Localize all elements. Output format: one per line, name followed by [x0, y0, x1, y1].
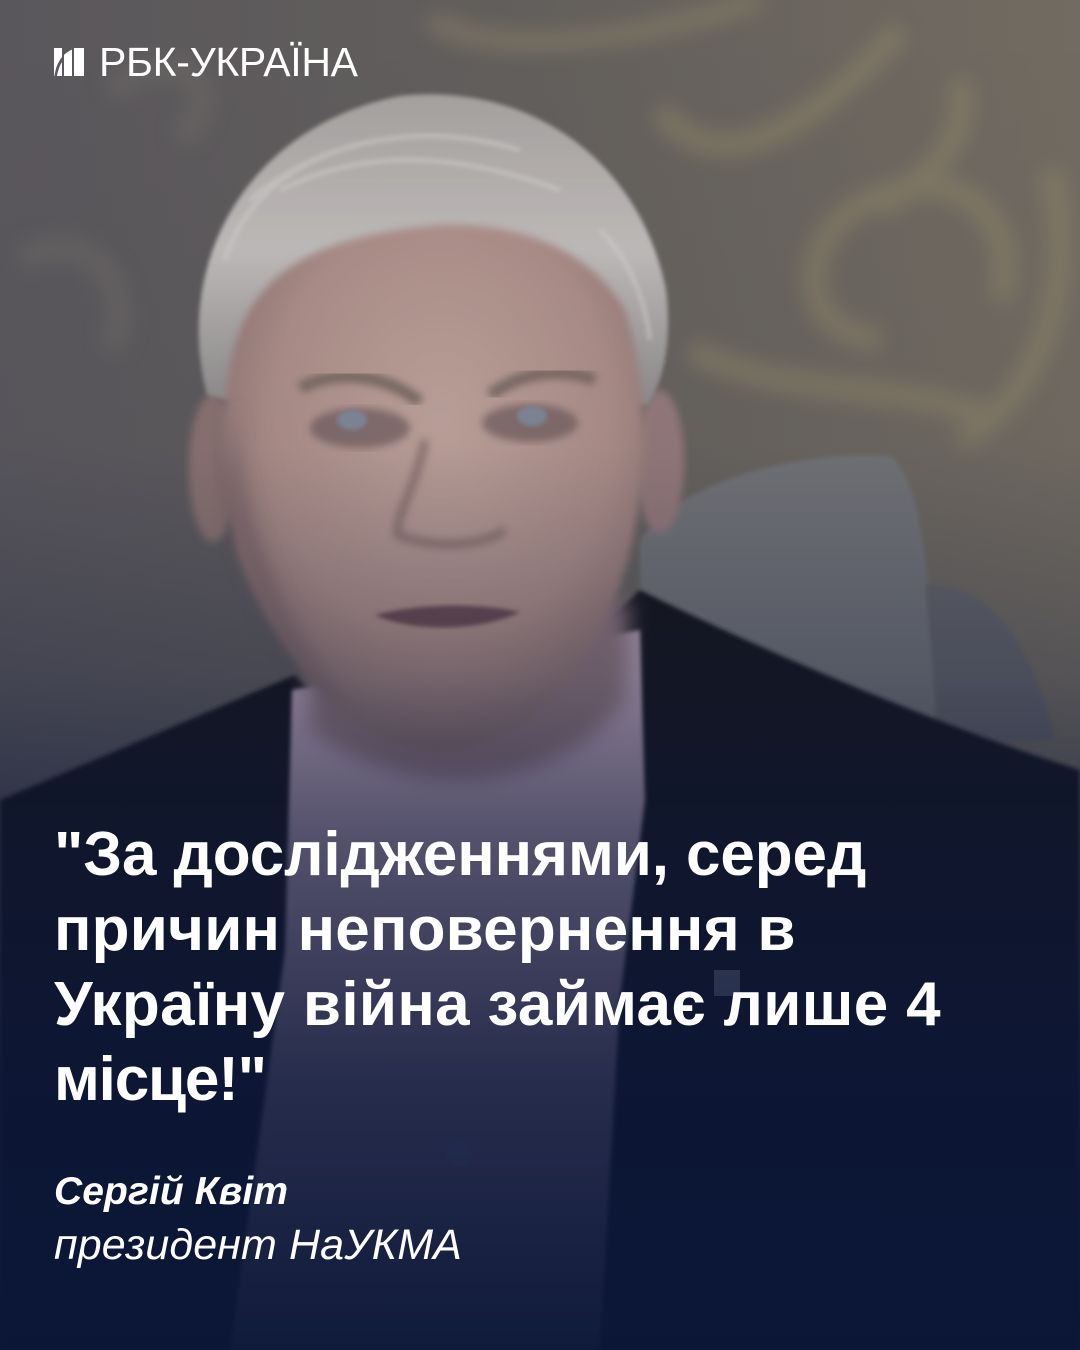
armchair — [640, 455, 1055, 745]
wall ornament — [20, 0, 1060, 440]
quote heading: "За дослідженнями, серед — [54, 820, 866, 889]
face shadow — [225, 400, 350, 710]
logo: РБК-Україна — [54, 39, 358, 85]
brows, eyes, nose, mouth — [300, 373, 595, 627]
lapel pin — [714, 970, 740, 996]
attribution: name: Сергій Квіт — [54, 1170, 288, 1213]
shirt button — [446, 1141, 472, 1167]
shirt — [230, 630, 645, 1350]
face — [224, 225, 644, 751]
hair strands — [225, 136, 650, 340]
quote heading: Україну війна займає лише 4 — [54, 970, 941, 1039]
quote heading: причин неповернення в — [54, 895, 796, 964]
icon: logo mark — [54, 48, 84, 76]
attribution: role: президент НаУКМА — [54, 1221, 462, 1269]
quote heading — [54, 820, 941, 1114]
hair backing — [199, 94, 668, 405]
ears — [189, 394, 237, 542]
neck — [310, 600, 630, 780]
jacket — [0, 590, 1080, 1350]
logo wordmark: РБК-УКРАЇНА — [99, 39, 358, 85]
quote heading: місце!" — [54, 1045, 266, 1114]
